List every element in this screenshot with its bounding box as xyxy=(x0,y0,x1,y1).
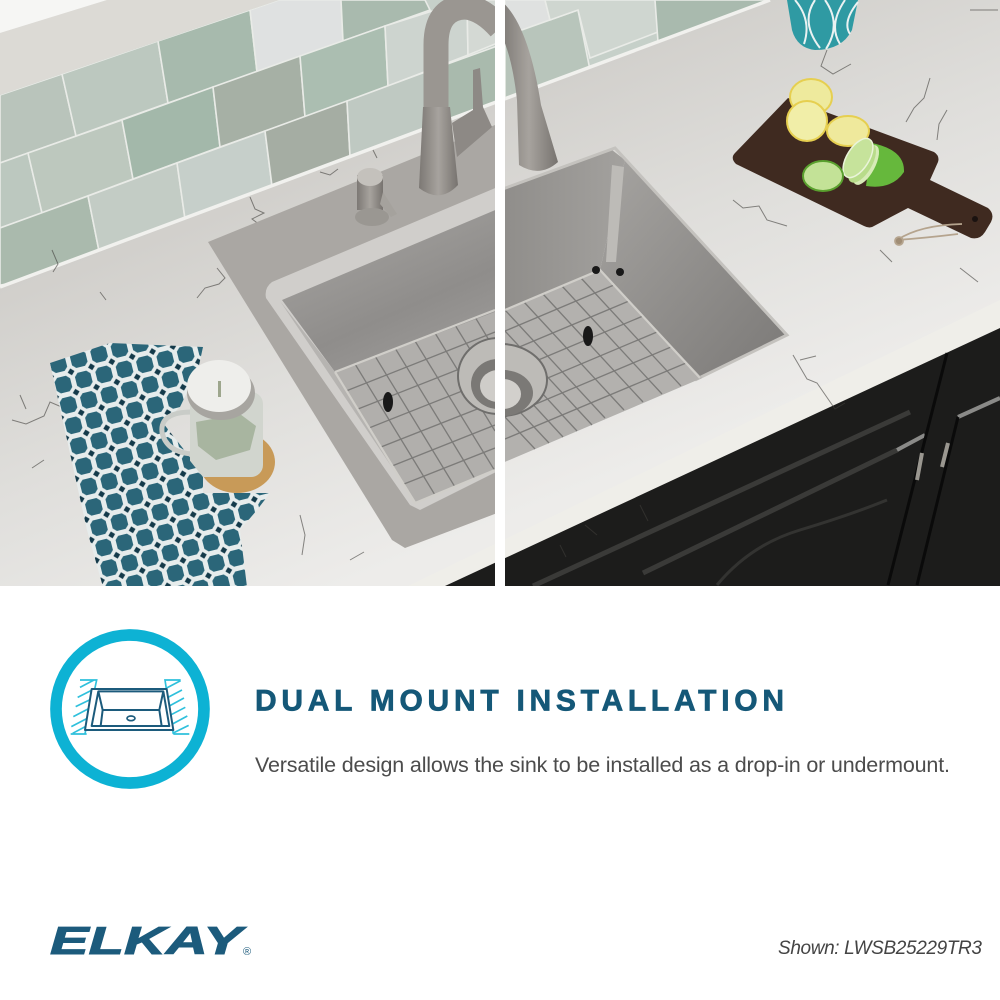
mason jar xyxy=(162,360,263,477)
lime slices xyxy=(803,134,904,191)
twine xyxy=(895,224,962,245)
soap dispenser xyxy=(355,168,389,226)
white divider xyxy=(495,0,505,586)
logo: Elkay: ELKAY xyxy=(50,920,246,963)
countertop back edge xyxy=(0,0,770,287)
towel xyxy=(50,343,270,587)
corner highlight xyxy=(606,165,624,262)
back wall of bowl xyxy=(282,208,500,372)
coaster xyxy=(204,440,275,493)
marble veins xyxy=(12,10,998,560)
vase xyxy=(787,0,858,50)
left half: drop-in sink xyxy=(50,7,538,587)
faucet base xyxy=(419,107,458,195)
cabinet hinges xyxy=(917,443,948,480)
photo: kitchen sink scene xyxy=(0,0,1000,587)
bowl floor xyxy=(335,310,500,502)
grid feet xyxy=(583,266,624,346)
towel flap xyxy=(190,460,203,490)
icon: dual mount sink badge xyxy=(56,635,204,783)
drain left xyxy=(457,337,495,415)
backsplash tiles xyxy=(0,0,800,300)
lemon slices xyxy=(787,79,869,146)
description: Versatile design allows the sink to be installed as a drop-in or undermount. xyxy=(255,753,950,777)
bowl floor xyxy=(500,270,702,464)
sink flange xyxy=(208,125,500,548)
logo: Elkay: ® xyxy=(243,946,251,958)
wire grid left xyxy=(335,310,495,503)
sink rim xyxy=(266,186,500,510)
drain xyxy=(127,716,135,721)
model caption: Shown: LWSB25229TR3 xyxy=(778,938,982,959)
drain right xyxy=(505,343,548,417)
bowl back wall xyxy=(500,150,625,312)
sink outline xyxy=(85,689,173,730)
faucet handle xyxy=(452,68,492,157)
grid foot xyxy=(383,392,393,412)
hatched counter right xyxy=(165,680,189,734)
cutting board xyxy=(733,98,992,238)
logo: Elkay xyxy=(50,920,251,963)
hatched counter left xyxy=(71,680,97,734)
badge ring xyxy=(56,635,204,783)
shelf above the backsplash xyxy=(0,0,279,95)
faucet neck xyxy=(436,7,500,112)
faucet spout xyxy=(505,4,558,171)
left wall of bowl xyxy=(281,302,390,465)
cabinet door panels xyxy=(533,353,1000,586)
cabinet base xyxy=(445,328,1000,586)
bowl right wall xyxy=(600,160,785,378)
heading: DUAL MOUNT INSTALLATION xyxy=(255,684,784,718)
wire grid right xyxy=(505,270,700,449)
counter front lip xyxy=(408,300,1000,586)
right half: undermount sink xyxy=(453,0,1000,586)
bowl rim xyxy=(500,148,787,380)
